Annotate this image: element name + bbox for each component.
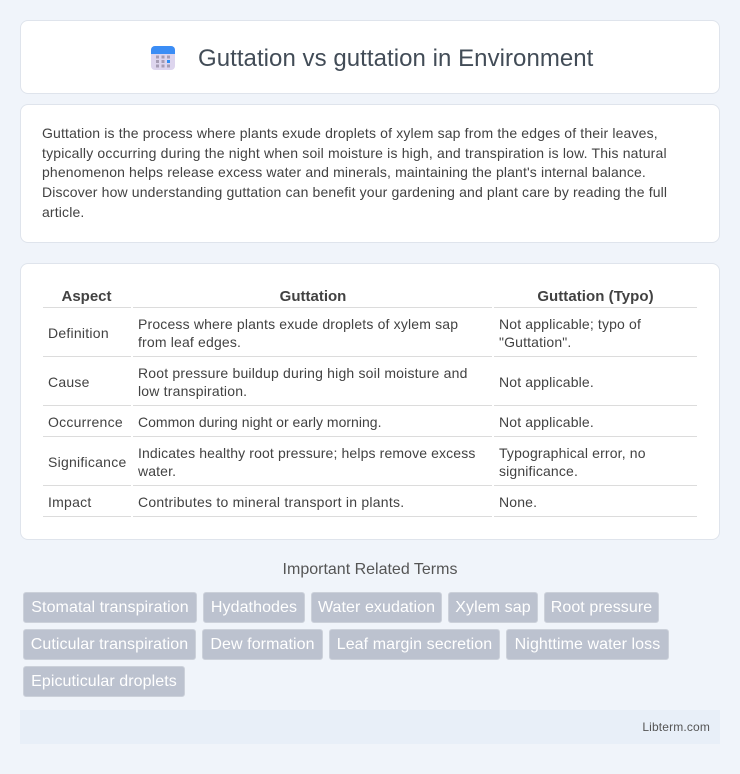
row: significance [48,445,646,479]
table header: Guttation [280,288,346,305]
panel: comparison table [20,263,720,540]
row: significance: Significance [48,454,126,470]
row: impact [48,494,537,510]
text block: introduction: article. [42,204,84,220]
tag [203,592,305,623]
tag [311,592,442,623]
tag: Water exudation [318,599,435,616]
table header [61,288,654,305]
row: cause: Not applicable. [499,374,594,390]
tag [202,629,323,660]
row: occurrence: Occurrence [48,414,123,430]
row: cause [48,365,594,399]
row: impact: None. [499,494,537,510]
tag [329,629,500,660]
row: significance: water. [138,463,176,479]
tag [506,629,669,660]
tag: Stomatal transpiration [31,599,189,616]
tag: Epicuticular droplets [31,673,177,690]
row: significance: Indicates healthy root pressure; helps remove excess [138,445,475,461]
row: definition: Not applicable; typo of [499,316,641,332]
row: cause: Cause [48,374,90,390]
row: definition: from leaf edges. [138,334,241,350]
panel: introduction [20,104,720,243]
text block: introduction: Discover how understanding guttation can benefit your gardening and plant care by reading the full [42,184,667,200]
text block: introduction: Guttation is the process where plants exude droplets of xylem sap from the edges of their leaves, [42,125,658,141]
text block: introduction: phenomenon helps release excess water and minerals, maintaining the plant's internal balance. [42,164,646,180]
table header: Guttation (Typo) [537,288,654,305]
panel: title card [20,20,720,94]
row: cause: low transpiration. [138,383,247,399]
row: definition: Definition [48,325,109,341]
tag: Root pressure [551,599,652,616]
tag: Cuticular transpiration [31,636,188,653]
heading: related terms: Important Related Terms [283,561,457,578]
row: definition [48,316,641,350]
title: Guttation vs guttation in Environment [198,45,593,72]
row: occurrence [48,414,594,430]
tag [544,592,659,623]
tag [23,629,196,660]
tag: Dew formation [210,636,315,653]
icon: calendar [151,46,175,70]
tag [23,666,185,697]
row: significance: significance. [499,463,578,479]
tag [448,592,538,623]
footer credit: Libterm.com [642,720,710,734]
row: impact: Impact [48,494,92,510]
table header: Aspect [61,288,112,305]
tag: Hydathodes [211,599,297,616]
text block: introduction: typically occurring during the night when soil moisture is high, and transpiration is low. This natural [42,145,667,161]
tag [23,592,197,623]
tag: Xylem sap [455,599,531,616]
row: definition: "Guttation". [499,334,571,350]
tag group: related terms [23,592,669,697]
footer bar [20,710,720,744]
row: cause: Root pressure buildup during high soil moisture and [138,365,468,381]
row: significance: Typographical error, no [499,445,646,461]
text block: introduction [42,125,667,220]
row: impact: Contributes to mineral transport in plants. [138,494,404,510]
tag: Nighttime water loss [515,636,660,653]
row: occurrence: Common during night or early morning. [138,414,382,430]
row: definition: Process where plants exude droplets of xylem sap [138,316,458,332]
tag: Leaf margin secretion [337,636,492,653]
row: occurrence: Not applicable. [499,414,594,430]
